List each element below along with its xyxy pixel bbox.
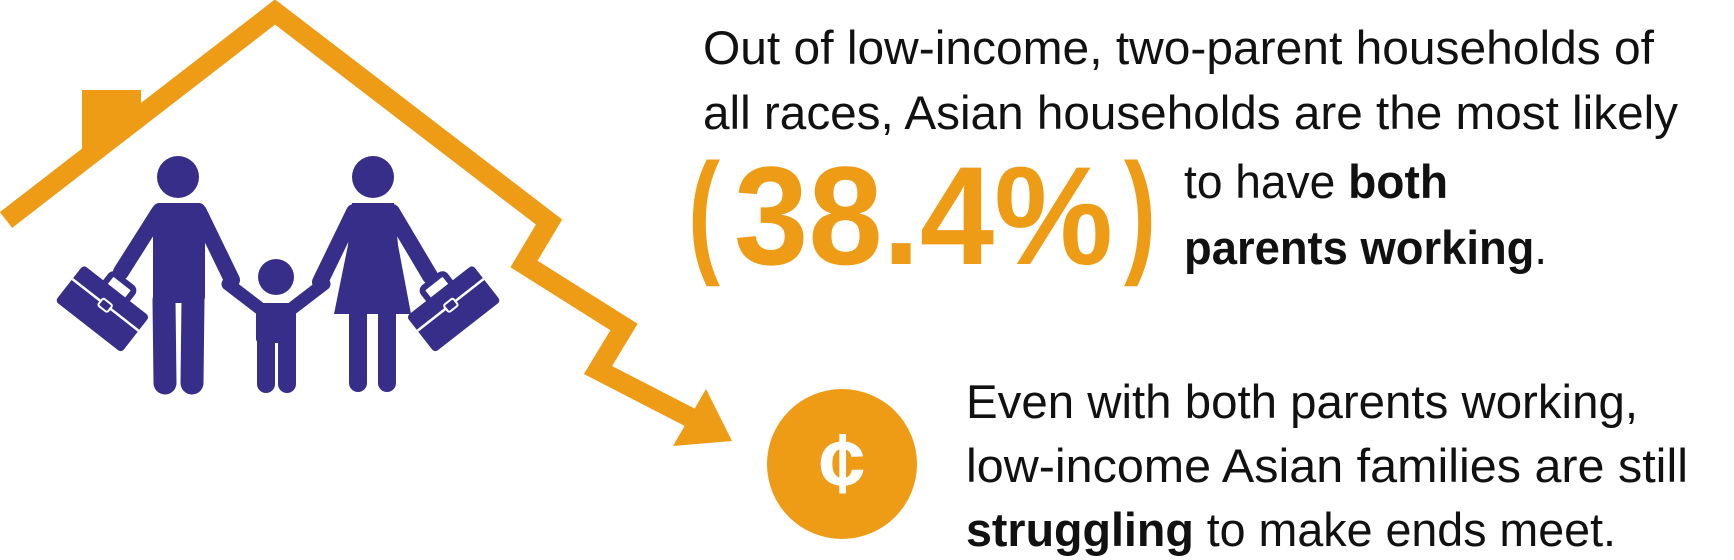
text: bottom statement: [966, 375, 1688, 556]
text: both parents working: parents working.: [1184, 221, 1547, 274]
text: bottom statement: struggling to make ends meet.: [966, 503, 1616, 556]
text: top statement: Out of low-income, two-parent households of: [703, 21, 1655, 74]
text: bottom statement: Even with both parents working,: [966, 375, 1638, 428]
woman: [320, 156, 430, 383]
text: top statement: all races, Asian households are the most likely: [703, 86, 1679, 139]
big stat 38.4%: (: [688, 135, 720, 287]
text: both parents working: [1184, 155, 1547, 274]
icon: briefcase right: [399, 255, 501, 353]
man: [121, 156, 232, 383]
big stat 38.4%: 38.4%: [734, 137, 1113, 294]
icon: family: [121, 156, 430, 384]
text: both parents working: to have both: [1184, 155, 1448, 208]
icon: cent coin: ¢: [819, 416, 865, 510]
house roof arrow: [6, 12, 732, 446]
text: top statement: [703, 21, 1679, 139]
big stat 38.4%: ): [1124, 135, 1156, 287]
icon: cent coin: [767, 389, 917, 539]
icon: briefcase left: [55, 255, 157, 353]
text: bottom statement: low-income Asian families are still: [966, 439, 1688, 492]
child: [228, 259, 324, 384]
